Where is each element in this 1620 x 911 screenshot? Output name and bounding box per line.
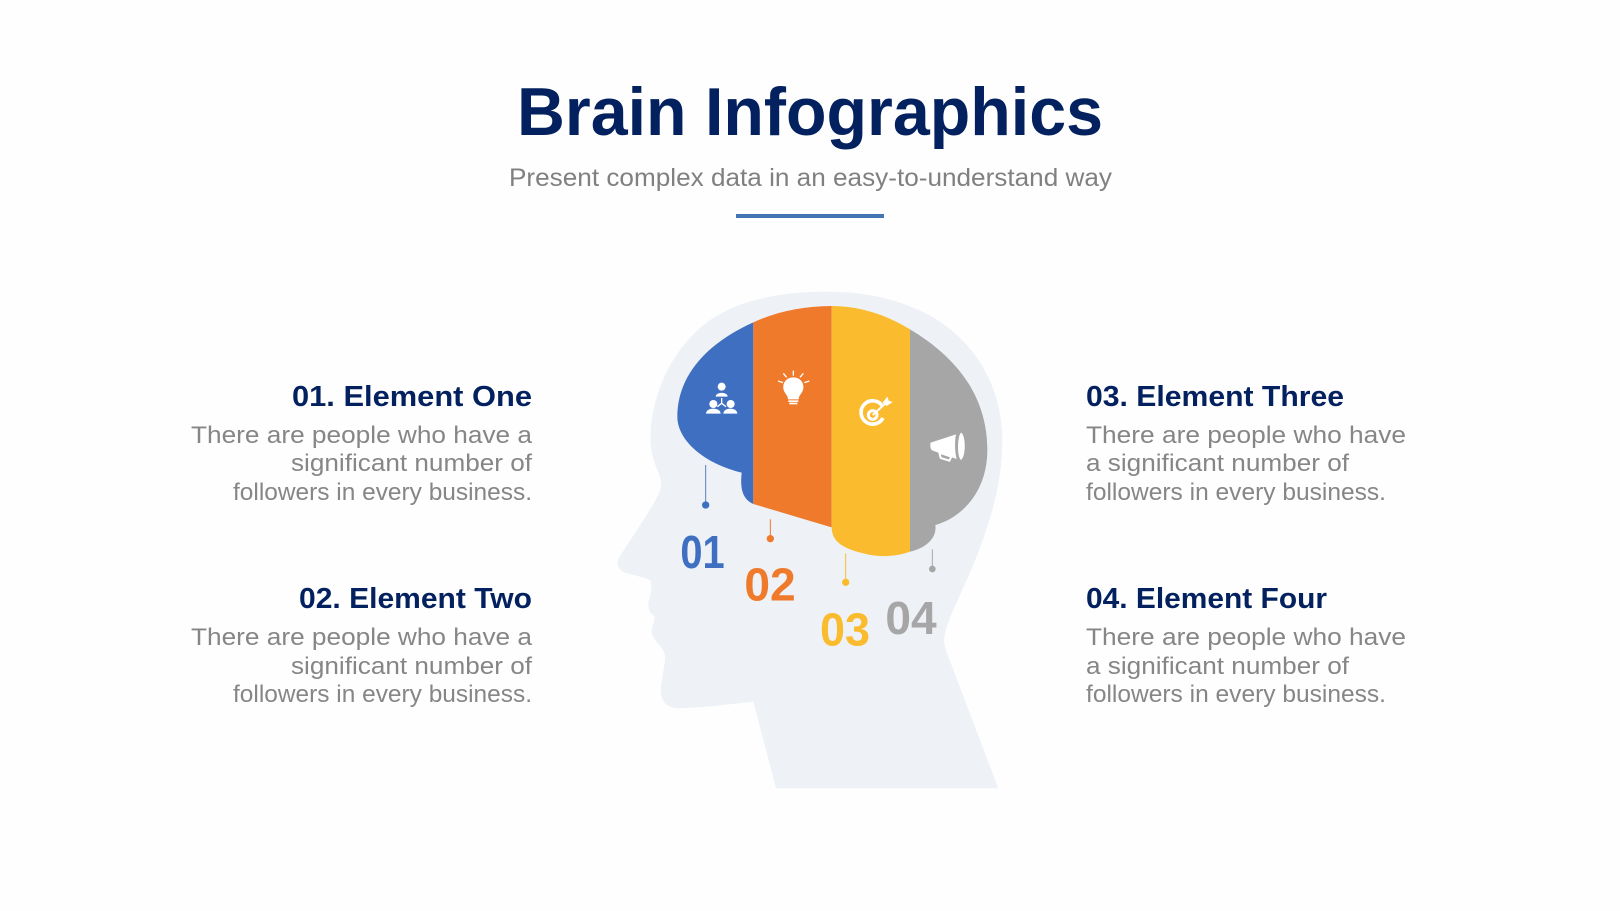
icon: people network bbox=[706, 383, 737, 414]
panel: element two text bbox=[191, 583, 532, 708]
heading: element three: 03. Element Three bbox=[1086, 381, 1344, 413]
brain section: blue bbox=[677, 322, 753, 504]
icon: target with dart bbox=[861, 397, 893, 424]
pin: 04 bbox=[929, 549, 936, 572]
title: Brain Infographics bbox=[517, 74, 1103, 150]
pin: 02 bbox=[767, 519, 774, 542]
panel: element four text bbox=[1086, 583, 1406, 708]
head silhouette bbox=[618, 292, 1002, 788]
body: element one: significant number of bbox=[291, 450, 532, 477]
head with brain diagram bbox=[618, 292, 1002, 788]
body: element three: a significant number of bbox=[1086, 450, 1349, 477]
number 03: 03 bbox=[820, 603, 870, 655]
body: element three: There are people who have bbox=[1086, 422, 1406, 449]
body: element three: followers in every business. bbox=[1086, 479, 1386, 506]
number 01: 01 bbox=[680, 526, 725, 578]
heading: element two: 02. Element Two bbox=[299, 583, 532, 615]
icon: megaphone bbox=[930, 433, 965, 461]
subtitle: Present complex data in an easy-to-understand way bbox=[509, 164, 1113, 192]
body: element one: followers in every business. bbox=[233, 479, 532, 506]
heading: element four: 04. Element Four bbox=[1086, 583, 1327, 615]
body: element two: significant number of bbox=[291, 653, 532, 680]
title underline bbox=[736, 214, 884, 218]
heading: element one: 01. Element One bbox=[292, 381, 532, 413]
pin: 03 bbox=[842, 553, 849, 586]
brain section: yellow bbox=[832, 306, 910, 556]
body: element three bbox=[1086, 422, 1406, 506]
body: element two: followers in every business. bbox=[233, 681, 532, 708]
body: element one: There are people who have a bbox=[191, 422, 532, 449]
panel: element one text bbox=[191, 381, 532, 506]
pin: 01 bbox=[702, 465, 709, 509]
panel: element three text bbox=[1086, 381, 1406, 506]
icon: light bulb bbox=[778, 371, 809, 404]
body: element four: a significant number of bbox=[1086, 653, 1349, 680]
body: element one bbox=[191, 422, 532, 506]
body: element four bbox=[1086, 624, 1406, 708]
brain section: orange bbox=[753, 306, 832, 527]
body: element two: There are people who have a bbox=[191, 624, 532, 651]
number 04: 04 bbox=[885, 592, 937, 644]
body: element four: There are people who have bbox=[1086, 624, 1406, 651]
number 02: 02 bbox=[744, 558, 796, 610]
body: element two bbox=[191, 624, 532, 708]
body: element four: followers in every business. bbox=[1086, 681, 1386, 708]
brain section: grey bbox=[910, 329, 987, 552]
